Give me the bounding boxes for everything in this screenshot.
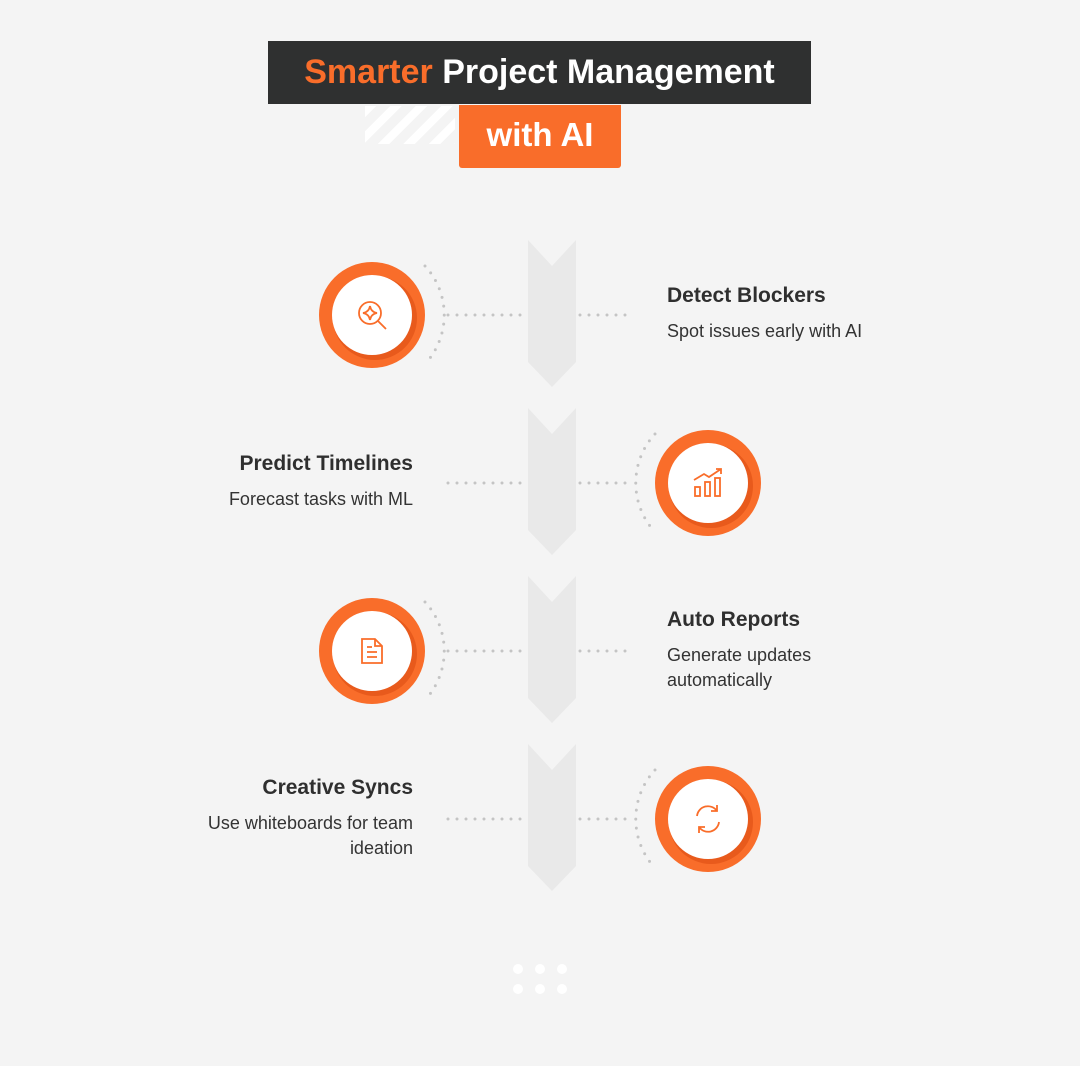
text: creative syncs: Use whiteboards for team — [208, 813, 413, 833]
chevrons — [528, 240, 576, 891]
text: predict timelines: Predict Timelines — [239, 452, 413, 475]
text: creative syncs: Creative Syncs — [262, 776, 413, 799]
title — [268, 41, 811, 104]
icon: predict timelines — [655, 430, 761, 536]
bottom dots — [513, 964, 567, 994]
icon: detect blockers — [319, 262, 425, 368]
text: auto reports: Generate updates — [667, 645, 811, 665]
decorative stripes — [365, 106, 455, 144]
icon: creative syncs — [655, 766, 761, 872]
text: detect blockers: Spot issues early with AI — [667, 321, 862, 341]
text: creative syncs: ideation — [350, 838, 413, 858]
text: auto reports: Auto Reports — [667, 608, 800, 631]
icon: auto reports — [319, 598, 425, 704]
text: detect blockers: Detect Blockers — [667, 284, 826, 307]
title: Smarter Project Management — [304, 53, 775, 91]
text: predict timelines: Forecast tasks with ML — [229, 489, 413, 509]
text: detect blockers — [667, 284, 862, 341]
subtitle: with AI — [487, 116, 593, 153]
text: creative syncs — [208, 776, 413, 858]
text: auto reports — [667, 608, 811, 690]
text: predict timelines — [229, 452, 413, 509]
text: auto reports: automatically — [667, 670, 772, 690]
subtitle — [459, 105, 621, 168]
